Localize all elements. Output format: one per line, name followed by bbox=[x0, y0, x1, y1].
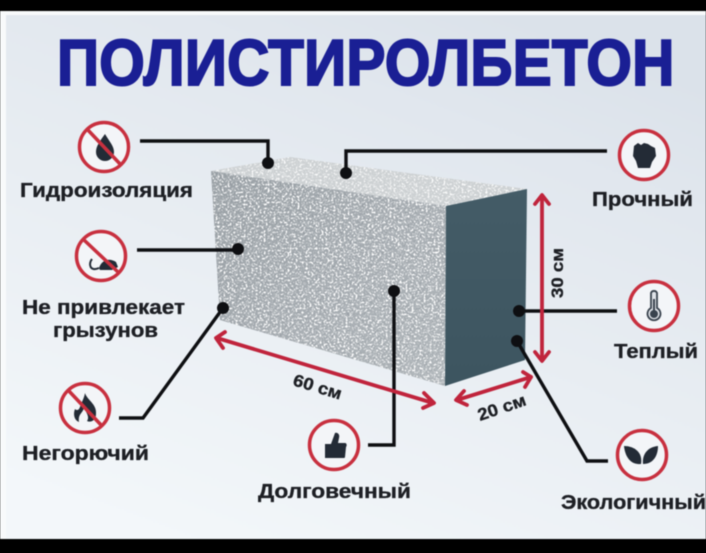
block top face bbox=[213, 157, 525, 206]
icon: thermometer bbox=[630, 282, 678, 330]
label: warm: Теплый bbox=[614, 340, 698, 363]
label: strong: Прочный bbox=[592, 188, 693, 211]
icon: fist bbox=[620, 130, 668, 180]
callout line: eco bbox=[517, 341, 608, 461]
block side face bbox=[445, 189, 527, 386]
callout dot: durable bbox=[388, 285, 400, 297]
label: not attractive to rodents: грызунов bbox=[53, 319, 158, 342]
label: 60 cm: 60 см bbox=[291, 371, 344, 403]
icon: leaves bbox=[618, 430, 666, 480]
item: non-combustible bbox=[22, 384, 149, 465]
item: warm bbox=[614, 282, 698, 363]
item: strong bbox=[592, 130, 693, 211]
concrete block bbox=[205, 150, 535, 390]
icon: crossed water drop bbox=[80, 122, 128, 172]
dimension arrow: 30 cm bbox=[535, 195, 549, 361]
icon: crossed flame bbox=[60, 384, 110, 432]
item: durable bbox=[258, 420, 411, 503]
label: not attractive to rodents: Не привлекает bbox=[22, 296, 185, 319]
item: rodents bbox=[22, 232, 185, 342]
callout dot: eco bbox=[511, 335, 523, 347]
item: eco bbox=[561, 430, 706, 514]
block front face bbox=[205, 165, 450, 390]
callout line: non-combustible bbox=[119, 308, 223, 418]
callout dot: rodents bbox=[232, 243, 244, 255]
callout dot: warm bbox=[513, 305, 525, 317]
callout dot: non-combustible bbox=[217, 302, 229, 314]
dimension arrow: 20 cm bbox=[456, 372, 531, 405]
callout line: rodents bbox=[137, 248, 238, 252]
icon: crossed rodent bbox=[76, 232, 126, 280]
label: non-combustible: Негорючий bbox=[22, 442, 149, 465]
callout dot: strong bbox=[340, 167, 352, 179]
icon: thumbs up bbox=[310, 420, 358, 470]
label: 20 cm: 20 см bbox=[475, 391, 529, 425]
label: 30 cm: 30 см bbox=[548, 248, 567, 298]
callout line: durable bbox=[368, 291, 394, 445]
callout line: waterproofing bbox=[140, 141, 268, 163]
dimension arrow: 60 cm bbox=[216, 332, 434, 408]
title: ПОЛИСТИРОЛБЕТОН bbox=[57, 27, 674, 100]
callout line: strong bbox=[346, 151, 607, 173]
callout line: warm bbox=[519, 309, 617, 313]
item: waterproofing bbox=[20, 122, 193, 202]
label: not attractive to rodents bbox=[22, 296, 185, 342]
callout dot: waterproofing bbox=[262, 157, 274, 169]
label: durable: Долговечный bbox=[258, 480, 411, 503]
label: waterproofing: Гидроизоляция bbox=[20, 179, 193, 202]
label: eco-friendly: Экологичный bbox=[561, 491, 706, 514]
